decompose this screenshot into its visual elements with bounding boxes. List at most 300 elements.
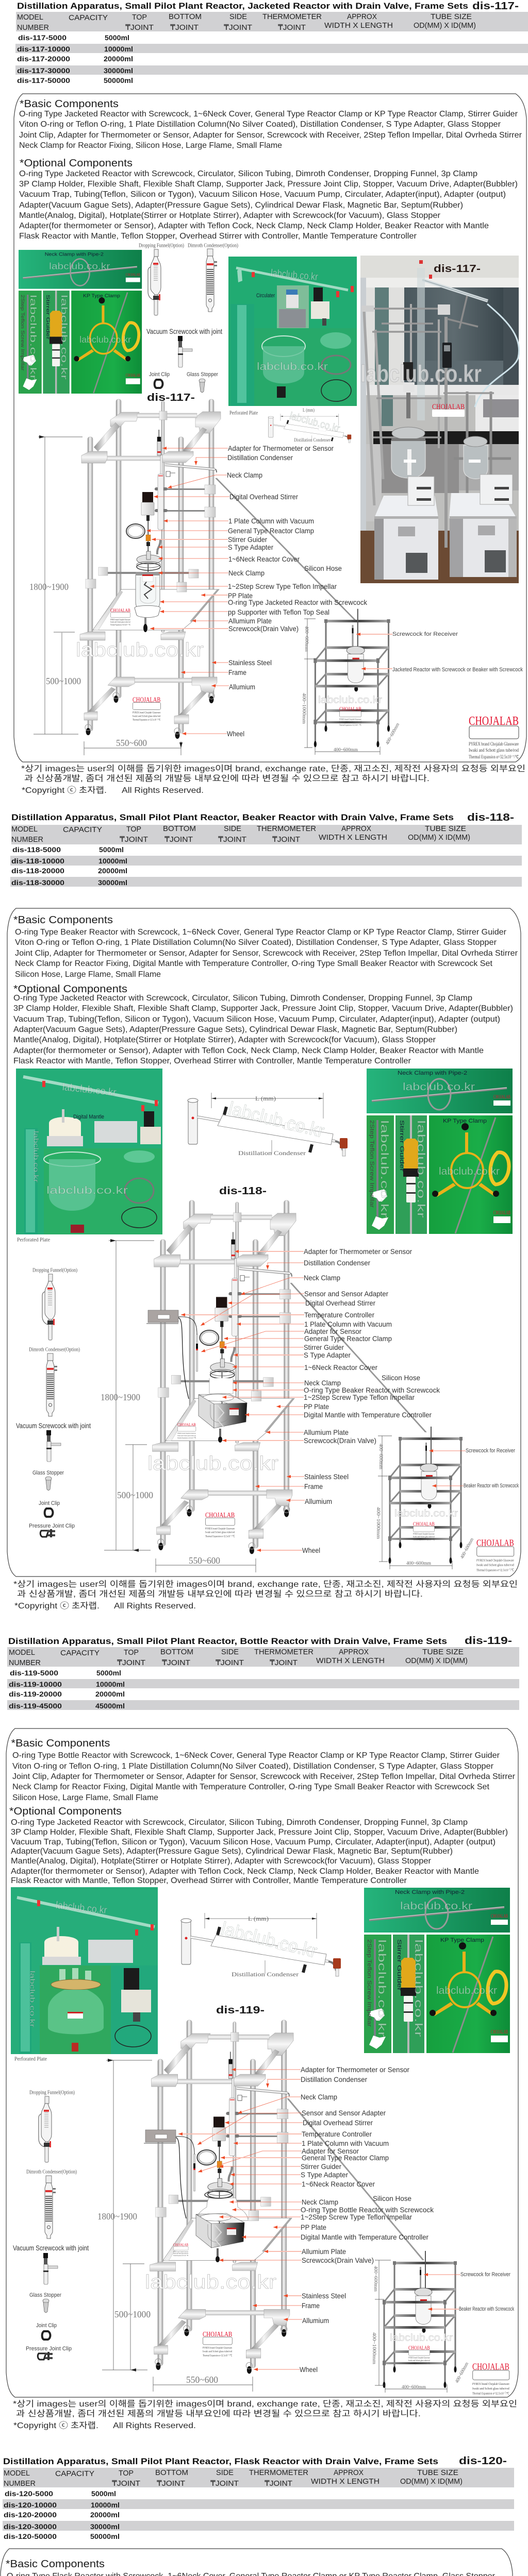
spec table: SIDE — [221, 1648, 239, 1656]
component labels: Adapter for Thermometer or Sensor — [301, 2065, 409, 2074]
spec table: dis-117-50000 — [17, 77, 70, 84]
photo tiles: neck clamp, impellar, stirrer guider, KP clamp: 2Step Teflon Screw Impellar — [366, 1939, 372, 2027]
component labels: Sensor and Sensor Adapter — [304, 1290, 388, 1298]
photo tiles: neck clamp, impellar, stirrer guider, KP clamp: Neck Clamp with Pipe-2 — [45, 251, 104, 257]
disclaimer notes: *상기 images는 user의 이해를 돕기위한 images이며 brand, exchange rate, 단종, 재고소진, 제작전 사용자의 요청등 외부요인 — [13, 2399, 517, 2409]
component labels: 1 Plate Column with Vacuum — [302, 2139, 389, 2147]
small receiver frame — [388, 1427, 463, 1564]
basic components text — [11, 1738, 516, 1802]
option glassware icons: Joint Clip — [149, 371, 170, 378]
photo collage: condenser, circulator, jacketed reactor parts — [228, 257, 357, 406]
spec table: SIDE — [224, 824, 241, 833]
optional components text: O-ring Type Jacketed Reactor with Screwcock, Circulator, Silicon Tubing, Dimroth Condenser, Dropping Funnel, 3p Clamp — [13, 994, 472, 1003]
photo tiles: neck clamp, impellar, stirrer guider, KP clamp: labclub.co.kr — [412, 1939, 424, 2038]
spec table: TOP — [126, 825, 141, 834]
spec table: OD(MM) X ID(MM) — [400, 2477, 463, 2486]
spec table: 5000ml — [105, 34, 129, 42]
dimension values: 1800~1900 — [101, 1392, 140, 1402]
optional components text: 3P Clamp Holder, Flexible Shaft, Flexible Shaft Clamp, Supporter Jack, Pressure Joint Clip, Stopper, Vacuum Drive, Adapter(Bubbler) — [19, 180, 518, 189]
CHOJALAB brand labels: Iwaki and Schott glass tube/rod — [110, 621, 130, 623]
photo tiles: neck clamp, impellar, stirrer guider, KP clamp: CHOJALAB — [491, 2029, 508, 2035]
component labels: 1~6Neck Reactor Cover — [302, 2180, 375, 2188]
spec table: APPROX — [347, 12, 377, 21]
option glassware icons: Joint Clip — [36, 2323, 57, 2329]
CHOJALAB brand labels: CHOJALAB — [413, 1521, 435, 1527]
photo collage: condenser, circulator, jacketed reactor parts: Circulater — [256, 293, 275, 299]
component labels: Wheel — [302, 1546, 320, 1554]
component labels — [302, 1247, 519, 1554]
component labels: Screwcock for Receiver — [392, 631, 458, 637]
CHOJALAB brand labels: CHOJALAB — [408, 2345, 430, 2351]
SECTION 4: dis-120 — [1, 2455, 514, 2576]
photo collage: condenser, mantle, beaker reactor: labclub.co.kr — [46, 1185, 128, 1196]
CHOJALAB brand labels: Thermal Expansion α=32.5x10⁻⁷/℃ — [476, 1568, 514, 1572]
spec table: CAPACITY — [63, 825, 102, 834]
CHOJALAB brand labels: CHOJALAB — [110, 608, 130, 614]
spec table: 45000ml — [95, 1702, 125, 1710]
CHOJALAB brand labels: Thermal Expansion α=32.5x10⁻⁷/℃ — [408, 2362, 430, 2364]
component labels: Screwcock(Drain Valve) — [228, 624, 299, 633]
CHOJALAB brand labels — [110, 608, 519, 759]
title: dis-117- — [472, 1, 519, 12]
CHOJALAB brand labels: Iwaki and Schott glass tube/rod — [469, 748, 519, 753]
photo tiles: neck clamp, impellar, stirrer guider, KP clamp — [364, 1888, 510, 2053]
spec table: ₸JOINT — [210, 2479, 239, 2488]
perforated plate caption: Perforated Plate — [14, 2057, 47, 2062]
photo collage: condenser, mantle, beaker reactor — [16, 1069, 162, 1234]
dimension values: 550~600 — [189, 1555, 220, 1566]
CHOJALAB brand labels: CHOJALAB — [339, 707, 361, 713]
optional components text: Mantle(Analog, Digital), Hotplate(Stirrer or Hotplate Stirrer), Adapter with Screwcock(for Vacuum), Glass Stopper — [19, 211, 441, 220]
perforated plate caption: Perforated Plate — [229, 410, 258, 416]
disclaimer notes: *상기 images는 user의 이해를 돕기위한 images이며 brand, exchange rate, 단종, 재고소진, 제작전 사용자의 요청등 외부요인 — [13, 1580, 518, 1589]
spec table: dis-120-20000 — [4, 2511, 57, 2519]
component labels: Frame — [302, 2301, 320, 2310]
photo: installed apparatus — [360, 256, 519, 583]
spec table: dis-119-10000 — [9, 1681, 62, 1688]
photo tiles: neck clamp, impellar, stirrer guider, KP clamp: 2Step Teflon Screw Impellar — [20, 295, 26, 371]
spec table: ₸JOINT — [164, 835, 193, 844]
CHOJALAB brand labels: Thermal Expansion α=32.5x10⁻⁷/℃ — [177, 1437, 196, 1439]
component labels: 1~6Neck Reactor Cover — [228, 555, 300, 563]
CHOJALAB brand labels: CHOJALAB — [203, 2330, 232, 2338]
title — [8, 1635, 512, 1647]
spec table: 20000ml — [95, 1690, 125, 1698]
CHOJALAB brand labels: PYREX brand Chojalab Glassware — [110, 619, 130, 621]
spec table: dis-119-20000 — [9, 1690, 62, 1698]
main frame diagram — [80, 399, 221, 739]
basic components text: O-ring Type Beaker Reactor with Screwcock, 1~6Neck Cover, General Type Reactor Clamp or KP Type Reactor Clamp, Stirrer Guider — [15, 928, 507, 937]
watermarks: labclub.co.kr — [76, 639, 204, 661]
SECTION 3: dis-119 — [6, 1635, 519, 2430]
distillation condenser drawing: L (mm) — [303, 408, 315, 413]
spec table: 10000ml — [91, 2501, 120, 2509]
optional components text — [19, 158, 518, 241]
title — [17, 1, 519, 12]
option glassware icons: Dimroth Condenser(Option) — [26, 2169, 77, 2175]
dimension lines — [104, 1241, 452, 1572]
component labels: Stirrer Guider — [301, 2162, 341, 2171]
basic components text: *Basic Components — [13, 914, 113, 926]
spec table: ₸JOINT — [272, 835, 300, 844]
CHOJALAB brand labels: Iwaki and Schott glass tube/rod — [205, 1531, 235, 1534]
dimension values: 400~600mm — [406, 1561, 432, 1566]
CHOJALAB brand labels — [173, 2243, 509, 2395]
dimension values: 400~600mm — [385, 722, 401, 745]
spec table: 30000ml — [90, 2523, 120, 2531]
optional components text: 3P Clamp Holder, Flexible Shaft, Flexible Shaft Clamp, Supporter Jack, Pressure Joint Clip, Stopper, Vacuum Drive, Adapter(Bubbler) — [11, 1828, 508, 1837]
spec table: TUBE SIZE — [422, 1648, 464, 1656]
CHOJALAB brand labels: Thermal Expansion α=32.5x10⁻⁷/℃ — [472, 2392, 509, 2395]
CHOJALAB brand labels: Thermal Expansion α=32.5x10⁻⁷/℃ — [413, 1538, 435, 1540]
optional components text: Flask Reactor with Mantle, Teflon Stopper, Overhead Stirrer with Controller, Mantle Temperature Controller — [19, 232, 417, 241]
CHOJALAB brand labels: Thermal Expansion α=32.5x10⁻⁷/℃ — [339, 723, 361, 726]
component labels: Screwcock(Drain Valve) — [302, 2256, 374, 2264]
photo tiles: neck clamp, impellar, stirrer guider, KP clamp: 2Step Teflon Screw Impellar — [369, 1120, 375, 1208]
CHOJALAB brand labels: Iwaki and Schott glass tube/rod — [413, 1536, 435, 1538]
photo tiles: neck clamp, impellar, stirrer guider, KP clamp: Stirrer Guider — [396, 1939, 402, 1991]
component labels: Silicon Hose — [382, 1374, 420, 1382]
spec table: 50000ml — [90, 2533, 120, 2540]
spec table: BOTTOM — [155, 2468, 188, 2477]
optional components text — [13, 984, 513, 1065]
spec table: BOTTOM — [160, 1648, 193, 1656]
component labels: Silicon Hose — [373, 2194, 411, 2202]
main frame diagram — [146, 1200, 296, 1554]
reactor model heading: dis-118- — [219, 1185, 267, 1197]
distillation condenser drawing — [268, 408, 351, 443]
spec table: ₸JOINT — [265, 2479, 292, 2488]
dimension values: 400~600mm — [455, 2361, 470, 2384]
component labels: Stirrer Guider — [304, 1343, 344, 1351]
component labels: Stainless Steel — [304, 1472, 349, 1481]
watermarks: labclub.co.kr — [147, 1453, 278, 1475]
disclaimer notes: *Copyright ⓒ 초자랩. — [22, 786, 107, 795]
spec table: THERMOMETER — [262, 12, 322, 21]
dimension values: 400~600mm — [334, 748, 358, 753]
option glassware icons: Pressure Joint Clip — [26, 2346, 72, 2352]
CHOJALAB brand labels: Iwaki and Schott glass tube/rod — [177, 1434, 196, 1436]
watermarks: labclub.co.kr — [390, 2333, 453, 2343]
spec table: 20000ml — [98, 867, 127, 875]
photo tiles: neck clamp, impellar, stirrer guider, KP clamp: Stirrer Guider — [399, 1120, 405, 1172]
photo tiles: neck clamp, impellar, stirrer guider, KP clamp: CHOJALAB — [126, 372, 140, 378]
CHOJALAB brand labels: PYREX brand Chojalab Glassware — [177, 1432, 196, 1434]
spec table: dis-118-10000 — [11, 857, 64, 865]
CHOJALAB brand labels: PYREX brand Chojalab Glassware — [205, 1528, 235, 1531]
option glassware icons: Glass Stopper — [32, 1470, 64, 1476]
optional components text — [9, 1806, 508, 1885]
distillation condenser drawing: labclub.co.kr — [288, 410, 341, 435]
dimension values: 400~600mm — [460, 1537, 475, 1560]
photo tiles: neck clamp, impellar, stirrer guider, KP clamp — [19, 250, 142, 394]
optional components text: Flask Reactor with Mantle, Teflon Stopper, Overhead Stirrer with Controller, Mantle Temperature Controller — [11, 1876, 407, 1885]
photo tiles: neck clamp, impellar, stirrer guider, KP clamp: labclub.co.kr — [376, 1939, 387, 2038]
spec table: dis-119-5000 — [10, 1669, 58, 1677]
spec table: 10000ml — [104, 45, 133, 53]
photo tiles: neck clamp, impellar, stirrer guider, KP clamp: labclub.co.kr — [439, 1166, 500, 1177]
spec table: OD(MM) X ID(MM) — [405, 1656, 468, 1665]
leader arrows — [181, 1251, 466, 1550]
spec table: TUBE SIZE — [431, 12, 472, 21]
component labels: Allumium — [302, 2316, 329, 2325]
spec table: ₸JOINT — [218, 835, 246, 844]
spec table: TOP — [132, 13, 147, 22]
CHOJALAB brand labels: Iwaki and Schott glass tube/rod — [133, 715, 161, 718]
CHOJALAB brand labels: PYREX brand Chojalab Glassware — [203, 2347, 233, 2350]
optional components text: 3P Clamp Holder, Flexible Shaft, Flexible Shaft Clamp, Supporter Jack, Pressure Joint Clip, Stopper, Vacuum Drive, Adapter(Bubbler) — [13, 1004, 513, 1013]
component labels: Digital Overhead Stirrer — [305, 1299, 375, 1307]
CHOJALAB brand labels: CHOJALAB — [472, 2361, 509, 2371]
dimension values: 550~600 — [116, 738, 147, 748]
component labels: Digital Mantle with Temperature Controller — [304, 1411, 432, 1419]
component labels: Stainless Steel — [228, 658, 272, 667]
spec table: ₸JOINT — [157, 2479, 185, 2488]
component labels: Sensor and Sensor Adapter — [302, 2109, 386, 2117]
silicon hose line — [287, 2098, 424, 2260]
panel: components outline — [14, 94, 526, 762]
dimension values: 400~1000mm — [301, 693, 306, 724]
spec table: dis-120-10000 — [4, 2501, 57, 2509]
component labels: Digital Mantle with Temperature Controller — [301, 2233, 428, 2241]
dimension values — [97, 2211, 470, 2390]
component labels: Neck Clamp — [302, 2198, 338, 2206]
photo: installed apparatus: labclub.co.kr — [360, 360, 482, 387]
component labels: O-ring Type Beaker Reactor with Screwcock — [304, 1386, 440, 1394]
component labels: Neck Clamp — [228, 569, 265, 577]
component labels: 1 Plate Column with Vacuum — [304, 1320, 392, 1328]
component labels: 1~2Step Screw Type Teflon Impellar — [304, 1393, 415, 1401]
option glassware icons: Dropping Funnel(Option) — [139, 243, 184, 248]
title: dis-119- — [465, 1635, 512, 1647]
component labels: Wheel — [227, 730, 244, 738]
distillation condenser drawing: L (mm) — [248, 1915, 269, 1922]
reactor model heading: dis-117- — [147, 392, 195, 403]
title: Distillation Apparatus, Small Pilot Plant Reactor, Flask Reactor with Drain Valve, Frame Sets — [3, 2457, 438, 2466]
silicon hose line — [290, 1283, 426, 1432]
title: dis-120- — [459, 2455, 507, 2467]
photo tiles: neck clamp, impellar, stirrer guider, KP clamp: KP Type Clamp — [440, 1937, 484, 1943]
option glassware icons: Dropping Funnel(Option) — [29, 2090, 75, 2096]
optional components text: Adapter(for thermometer or Sensor), Adapter with Teflon Cock, Neck Clamp, Neck Clamp Holder, Beaker Reactor with Mantle — [19, 222, 489, 230]
disclaimer notes — [21, 764, 525, 795]
component labels: 1 Plate Column with Vacuum — [228, 517, 314, 525]
component labels: General Type Reactor Clamp — [302, 2154, 389, 2162]
dimension values: 400~600mm — [378, 1444, 383, 1470]
spec table: MODEL — [11, 825, 38, 834]
option glassware icons: Vacuum Screwcock with joint — [146, 327, 222, 335]
CHOJALAB brand labels: Iwaki and Schott glass tube/rod — [408, 2360, 430, 2362]
spec table: ₸JOINT — [162, 1658, 190, 1667]
disclaimer notes: All Rights Reserved. — [113, 2421, 196, 2430]
spec table — [15, 12, 528, 84]
spec table: 10000ml — [98, 857, 127, 865]
panel: components outline — [6, 1728, 518, 2397]
disclaimer notes — [13, 1580, 518, 1611]
perforated plate caption: Perforated Plate — [17, 1238, 51, 1243]
photo tiles: neck clamp, impellar, stirrer guider, KP clamp: Neck Clamp with Pipe-2 — [395, 1889, 465, 1895]
distillation condenser drawing: Distillation Condenser — [238, 1149, 306, 1157]
watermarks: labclub.co.kr — [394, 1509, 458, 1519]
spec table: ₸JOINT — [216, 1658, 244, 1667]
component labels: pp Supporter with Teflon Top Seal — [228, 608, 329, 616]
CHOJALAB brand labels: Thermal Expansion α=32.5x10⁻⁷/℃ — [173, 2255, 189, 2257]
CHOJALAB brand labels: PYREX brand Chojalab Glassware — [413, 1533, 435, 1535]
dimension values: 1800~1900 — [97, 2211, 137, 2222]
photo tiles: neck clamp, impellar, stirrer guider, KP clamp: labclub.co.kr — [415, 1120, 426, 1218]
dimension values: 400~600mm — [402, 2385, 426, 2390]
spec table — [7, 1647, 519, 1710]
component labels — [300, 2065, 514, 2374]
spec table: CAPACITY — [69, 13, 108, 22]
spec table: dis-120-50000 — [4, 2533, 57, 2540]
basic components text: *Basic Components — [11, 1738, 110, 1749]
spec table: ₸JOINT — [120, 835, 148, 844]
component labels: Distillation Condenser — [301, 2075, 367, 2083]
basic components text: Viton O-ring or Teflon O-ring, 1 Plate Distillation Column(No Silver Coated), Distillation Condenser, S Type Adapter, Glass Stopper — [12, 1762, 494, 1771]
component labels: Screwcock for Receiver — [466, 1448, 515, 1454]
photo tiles: neck clamp, impellar, stirrer guider, KP clamp: labclub.co.kr — [49, 261, 110, 271]
main frame diagram — [144, 2020, 293, 2374]
disclaimer notes: All Rights Reserved. — [122, 786, 204, 795]
spec table: 30000ml — [98, 879, 127, 887]
optional components text: Adapter(Vacuum Gague Sets), Adapter(Pressure Gague Sets), Cylindrical Dewar Flask, Magnetic Bar, Septum(Rubber) — [11, 1847, 453, 1856]
title: Distillation Apparatus, Small Pilot Plant Reactor, Bottle Reactor with Drain Valve, Frame Sets — [8, 1637, 447, 1646]
component labels: PP Plate — [304, 1402, 329, 1411]
CHOJALAB brand labels: PYREX brand Chojalab Glassware — [408, 2357, 430, 2359]
photo tiles: neck clamp, impellar, stirrer guider, KP clamp: CHOJALAB — [491, 1913, 508, 1919]
distillation condenser drawing: L (mm) — [255, 1095, 276, 1102]
spec table: SIDE — [229, 12, 247, 21]
reactor model heading: dis-119- — [216, 2005, 265, 2016]
option glassware icons: Glass Stopper — [187, 371, 218, 378]
component labels: Adapter for Thermometer or Sensor — [228, 444, 334, 452]
distillation condenser drawing — [188, 1093, 348, 1157]
photo tiles: neck clamp, impellar, stirrer guider, KP clamp: CHOJALAB — [493, 1210, 510, 1216]
component labels: Allumium — [305, 1497, 332, 1505]
title — [11, 812, 514, 823]
disclaimer notes — [13, 2399, 517, 2430]
spec table: 5000ml — [91, 2490, 116, 2498]
photo collage: condenser, mantle, beaker reactor: labclub.co.kr — [32, 1131, 40, 1183]
component labels: Distillation Condenser — [227, 453, 293, 462]
spec table: BOTTOM — [163, 824, 196, 833]
CHOJALAB brand labels: CHOJALAB — [177, 1422, 196, 1427]
option glassware icons: Vacuum Screwcock with joint — [13, 2244, 89, 2252]
spec table: THERMOMETER — [249, 2468, 308, 2477]
CHOJALAB brand labels: PYREX brand Chojalab Glassware — [476, 1559, 514, 1563]
spec table: MODEL — [9, 1648, 35, 1657]
photo tiles: neck clamp, impellar, stirrer guider, KP clamp: Neck Clamp with Pipe-2 — [398, 1070, 467, 1076]
watermarks: labclub.co.kr — [145, 2272, 276, 2293]
watermarks — [76, 639, 383, 706]
photo tiles: neck clamp, impellar, stirrer guider, KP clamp: labclub.co.kr — [403, 1081, 475, 1093]
small receiver frame — [314, 609, 390, 747]
dimension lines — [102, 2060, 447, 2393]
component labels: Wheel — [300, 2365, 318, 2374]
basic components text: *Basic Components — [20, 98, 119, 110]
component labels: S Type Adapter — [301, 2171, 348, 2179]
basic components text: O-ring Type Jacketed Reactor with Screwcock, 1~6Neck Cover, General Type Reactor Clamp or KP Type Reactor Clamp, Stirrer Guider — [19, 110, 518, 118]
photo tiles: neck clamp, impellar, stirrer guider, KP clamp: labclub.co.kr — [378, 1120, 390, 1218]
leader arrows — [146, 448, 392, 734]
photo collage: condenser, circulator, jacketed reactor parts: labclub.co.kr — [257, 361, 328, 372]
component labels: Allumium Plate — [304, 1428, 349, 1436]
dimension values: 400~1000mm — [375, 1507, 381, 1539]
component labels: O-ring Type Bottle Reactor with Screwcock — [301, 2206, 434, 2214]
photo tiles: neck clamp, impellar, stirrer guider, KP clamp: KP Type Clamp — [83, 293, 120, 298]
basic components text: *Basic Components — [6, 2558, 105, 2570]
CHOJALAB brand labels: CHOJALAB — [133, 696, 160, 703]
title — [3, 2455, 507, 2467]
component labels: Neck Clamp — [304, 1379, 341, 1387]
component labels: Adapter for Thermometer or Sensor — [304, 1247, 412, 1256]
spec table: ₸JOINT — [224, 23, 252, 32]
disclaimer notes: *Copyright ⓒ 초자랩. — [13, 2421, 98, 2430]
component labels: Neck Clamp — [227, 471, 262, 479]
disclaimer notes: *상기 images는 user의 이해를 돕기위한 images이며 brand, exchange rate, 단종, 재고소진, 제작전 사용자의 요청등 외부요인 — [21, 764, 525, 773]
component labels: PP Plate — [301, 2223, 326, 2231]
spec table: APPROX — [341, 824, 371, 833]
spec table: TUBE SIZE — [425, 824, 466, 833]
spec table: MODEL — [4, 2469, 30, 2478]
optional components text: *Optional Components — [13, 984, 127, 995]
spec table: dis-118-30000 — [11, 879, 64, 887]
component labels: S Type Adapter — [228, 543, 273, 551]
CHOJALAB brand labels: Iwaki and Schott glass tube/rod — [476, 1564, 514, 1567]
spec table: THERMOMETER — [254, 1648, 314, 1656]
spec table: ₸JOINT — [278, 23, 306, 32]
basic components text: Neck Clamp for Reactor Fixing, Digital Mantle with Temperature Controller, O-ring Type Small Beaker Reactor with Screwcock Set — [15, 959, 493, 968]
basic components text: Viton O-ring or Teflon O-ring, 1 Plate Distillation Column(No Silver Coated), Distillation Condenser, S Type Adapter, Glass Stopper — [19, 120, 501, 129]
basic components text: Viton O-ring or Teflon O-ring, 1 Plate Distillation Column(No Silver Coated), Distillation Condenser, S Type Adapter, Glass Stopper — [15, 938, 497, 947]
option glassware icons — [13, 2090, 89, 2360]
component labels: Frame — [228, 668, 246, 676]
basic components text — [6, 2558, 510, 2576]
photo collage: condenser, mantle, bottle reactor: labclub.co.kr — [29, 1971, 36, 2028]
spec table: ₸JOINT — [270, 1658, 298, 1667]
CHOJALAB brand labels: Thermal Expansion α=32.5x10⁻⁷/℃ — [205, 1535, 235, 1538]
spec table: dis-119-45000 — [9, 1702, 62, 1710]
spec table: TOP — [124, 1648, 139, 1657]
small receiver frame — [383, 2251, 457, 2388]
spec table: WIDTH X LENGTH — [319, 833, 387, 842]
watermarks — [145, 2272, 453, 2343]
spec table: dis-118-20000 — [11, 867, 64, 875]
photo collage: condenser, mantle, beaker reactor: Digital Mantle — [73, 1114, 104, 1120]
title: Distillation Apparatus, Small Pilot Plant Reactor, Jacketed Reactor with Drain Valve, Frame Sets — [17, 2, 468, 11]
CHOJALAB brand labels: CHOJALAB — [205, 1511, 235, 1519]
spec table — [3, 2468, 514, 2540]
watermarks — [147, 1453, 458, 1519]
spec table: ₸JOINT — [125, 23, 154, 32]
spec table: NUMBER — [9, 1658, 41, 1667]
dimension values — [29, 582, 401, 753]
disclaimer notes: All Rights Reserved. — [114, 1602, 196, 1611]
component labels: PP Plate — [228, 591, 253, 600]
basic components text: Neck Clamp for Reactor Fixing, Digital Mantle with Temperature Controller, O-ring Type Small Beaker Reactor with Screwcock Set — [12, 1783, 490, 1791]
option glassware icons: Glass Stopper — [29, 2292, 61, 2298]
optional components text: Vacuum Trap, Tubing(Teflon, Silicon or Tygon), Vacuum Silicon Hose, Vacuum Pump, Circulater, Adapter(input), Adapter (output) — [13, 1015, 500, 1024]
photo: installed apparatus: dis-117- — [434, 263, 481, 275]
dimension values: 500~1000 — [117, 1490, 153, 1500]
dimension values: 400~1000mm — [371, 2332, 376, 2365]
spec table: WIDTH X LENGTH — [316, 1656, 385, 1665]
spec table: 10000ml — [96, 1681, 125, 1688]
component labels: Neck Clamp — [301, 2093, 337, 2101]
component labels: Silicon Hose — [304, 564, 342, 572]
spec table: 5000ml — [99, 846, 124, 854]
